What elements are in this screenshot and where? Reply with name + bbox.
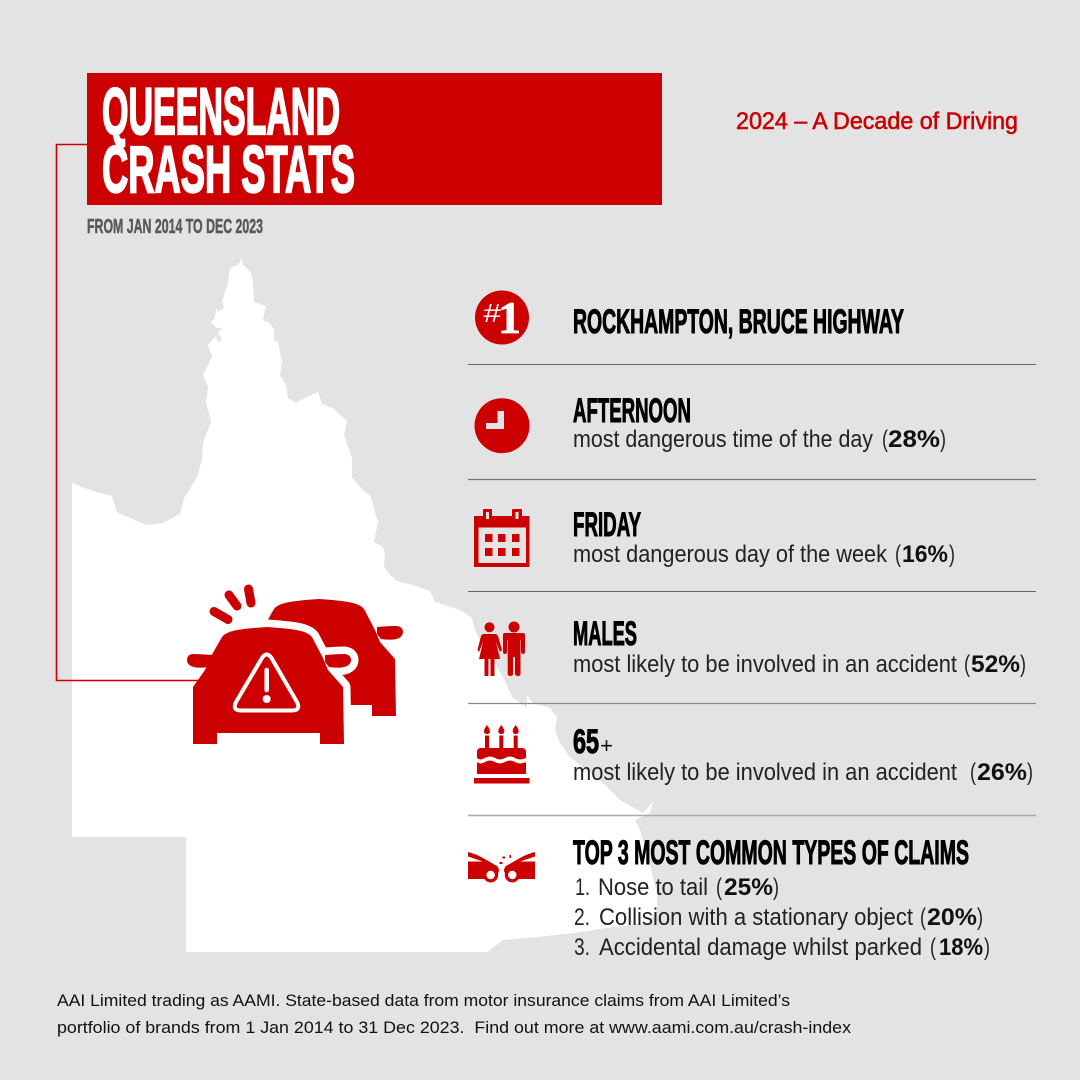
row dividers (468, 364, 1036, 816)
heading: 65 (573, 723, 599, 761)
claim 3: 3. (574, 934, 590, 961)
halo around front car (205, 627, 351, 744)
claim 3: ( (930, 934, 936, 961)
claim 1: ( (716, 874, 722, 901)
icon: two cars with warning triangle (187, 589, 403, 744)
front car (187, 627, 351, 744)
title line 1: QUEENSLAND (102, 74, 340, 148)
connector line (56, 144, 205, 680)
claim 1: Nose to tail (598, 874, 708, 901)
title banner (87, 73, 662, 206)
footer note (57, 991, 852, 1037)
header tag: decade of driving: 2024 – A Decade of Driving (736, 108, 1018, 135)
icon: woman and man (478, 622, 525, 676)
row: over 65 (474, 723, 1033, 786)
footer note: AAI Limited trading as AAMI. State-based data from motor insurance claims from AAI Limited’s (57, 991, 790, 1010)
icon: clock (474, 398, 530, 453)
description: ( (882, 426, 888, 453)
icon: number one badge: # (484, 298, 502, 328)
description: ( (895, 541, 901, 568)
claim 2: ) (977, 904, 983, 931)
icon: number one badge: 1 (498, 292, 521, 343)
claim 3: Accidental damage whilst parked (599, 934, 922, 961)
description: most likely to be involved in an accident (573, 759, 957, 786)
description: ) (949, 541, 955, 568)
claim 1 (575, 874, 779, 901)
subtitle: date range: FROM JAN 2014 TO DEC 2023 (87, 216, 263, 238)
description: 16% (902, 541, 948, 568)
description: most likely to be involved in an accident (573, 651, 957, 678)
claim 1: ) (773, 874, 779, 901)
description: most dangerous time of the day (573, 426, 873, 453)
claim 2: 2. (574, 904, 590, 931)
rear car (245, 599, 403, 716)
footer note: portfolio of brands from 1 Jan 2014 to 31 Dec 2023. Find out more at www.aami.com.au/crash-index (57, 1018, 852, 1037)
row: number one location (475, 290, 904, 344)
claim 3: 18% (939, 934, 983, 961)
description: ) (1027, 759, 1033, 786)
row: top 3 claims (468, 834, 990, 961)
map: Queensland silhouette (72, 259, 657, 952)
heading: FRIDAY (573, 506, 641, 544)
claim 2: Collision with a stationary object (599, 904, 913, 931)
description: 28% (888, 426, 940, 453)
claim 3: ) (984, 934, 990, 961)
row: males (478, 615, 1026, 678)
icon: birthday cake (474, 725, 530, 784)
impact marks (214, 589, 251, 620)
claim 1: 25% (724, 874, 773, 901)
heading: AFTERNOON (573, 392, 691, 430)
row: afternoon (474, 392, 946, 453)
claim 1: 1. (575, 874, 590, 901)
title line 2: CRASH STATS (102, 132, 355, 206)
description: ( (970, 759, 976, 786)
warning triangle (235, 654, 298, 710)
description: ) (1020, 651, 1026, 678)
description: most dangerous day of the week (573, 541, 888, 568)
icon: head-on collision (468, 852, 535, 882)
claim 2: 20% (927, 904, 977, 931)
description: ( (964, 651, 970, 678)
description: 52% (971, 651, 1020, 678)
icon: number one badge (475, 290, 529, 344)
description: ) (940, 426, 946, 453)
heading: MALES (573, 615, 637, 653)
row: friday (474, 506, 955, 568)
claim 2: ( (920, 904, 926, 931)
icon: calendar (474, 509, 530, 567)
description: 26% (977, 759, 1027, 786)
heading: + (600, 733, 613, 758)
